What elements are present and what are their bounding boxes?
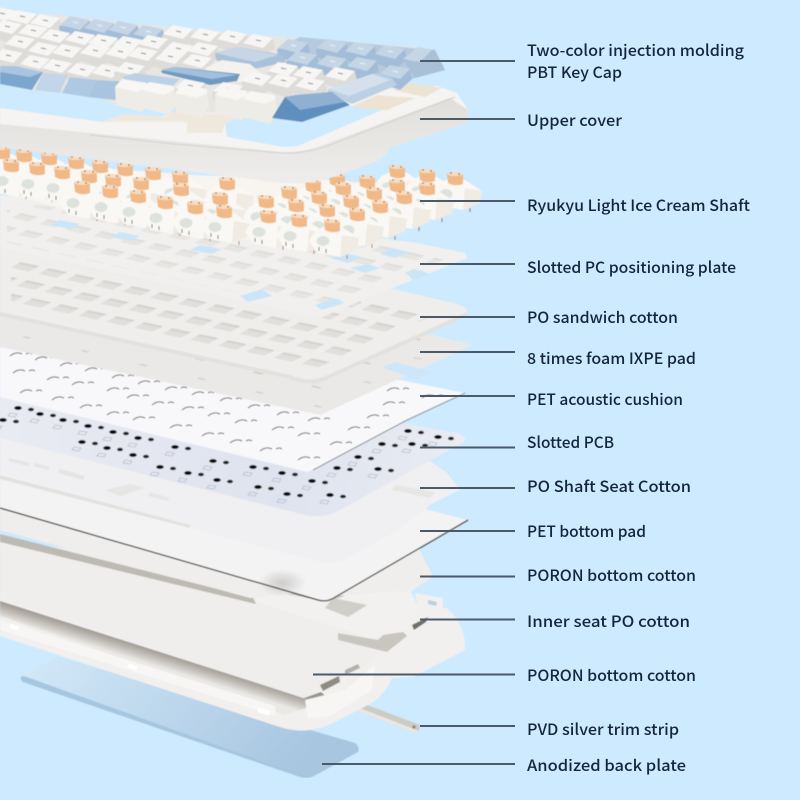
callout: PORON upper: PORON bottom cotton — [527, 564, 696, 586]
callout: IXPE: 8 times foam IXPE pad — [527, 347, 696, 369]
callout: shaft: Ryukyu Light Ice Cream Shaft — [527, 194, 750, 216]
callout: trim strip: PVD silver trim strip — [527, 718, 679, 740]
callout: shaft seat: PO Shaft Seat Cotton — [527, 475, 691, 497]
PORON bottom cotton plate — [0, 540, 400, 698]
PORON bottom cotton upper layer — [0, 500, 433, 598]
upper cover frame — [0, 60, 468, 183]
Ryukyu switches — [0, 146, 482, 259]
PET acoustic cushion — [0, 347, 465, 472]
cushion switch cut-outs — [10, 353, 444, 460]
PVD silver trim strip — [350, 703, 420, 733]
callout: upper cover: Upper cover — [527, 109, 623, 131]
callout: key cap: PBT Key Cap — [527, 61, 622, 83]
callout: PO sandwich: PO sandwich cotton — [527, 306, 678, 328]
anodized back plate — [21, 657, 359, 778]
keyboard illustration — [0, 7, 482, 778]
callout: key cap: Two-color injection molding — [527, 39, 744, 61]
bottom case shell — [0, 598, 465, 731]
PO shaft seat cotton — [0, 430, 460, 562]
callout: key cap — [420, 39, 744, 83]
callout: back plate: Anodized back plate — [527, 754, 686, 776]
inner seat PO cotton — [0, 534, 443, 652]
PCB solder pads — [0, 406, 454, 504]
callout: PET bottom: PET bottom pad — [527, 520, 646, 542]
callout: PORON lower: PORON bottom cotton — [527, 664, 696, 686]
callout: PC plate: Slotted PC positioning plate — [527, 256, 736, 278]
callout: PCB: Slotted PCB — [527, 431, 614, 453]
callout: inner seat: Inner seat PO cotton — [527, 610, 690, 632]
8 times foam IXPE pad — [0, 315, 473, 415]
slotted PCB — [0, 395, 465, 516]
PET bottom pad — [0, 460, 468, 601]
PO sandwich cotton plate — [0, 245, 468, 384]
slotted PC positioning plate — [0, 195, 467, 318]
callout: PET acoustic: PET acoustic cushion — [527, 388, 683, 410]
keycaps — [0, 7, 445, 124]
